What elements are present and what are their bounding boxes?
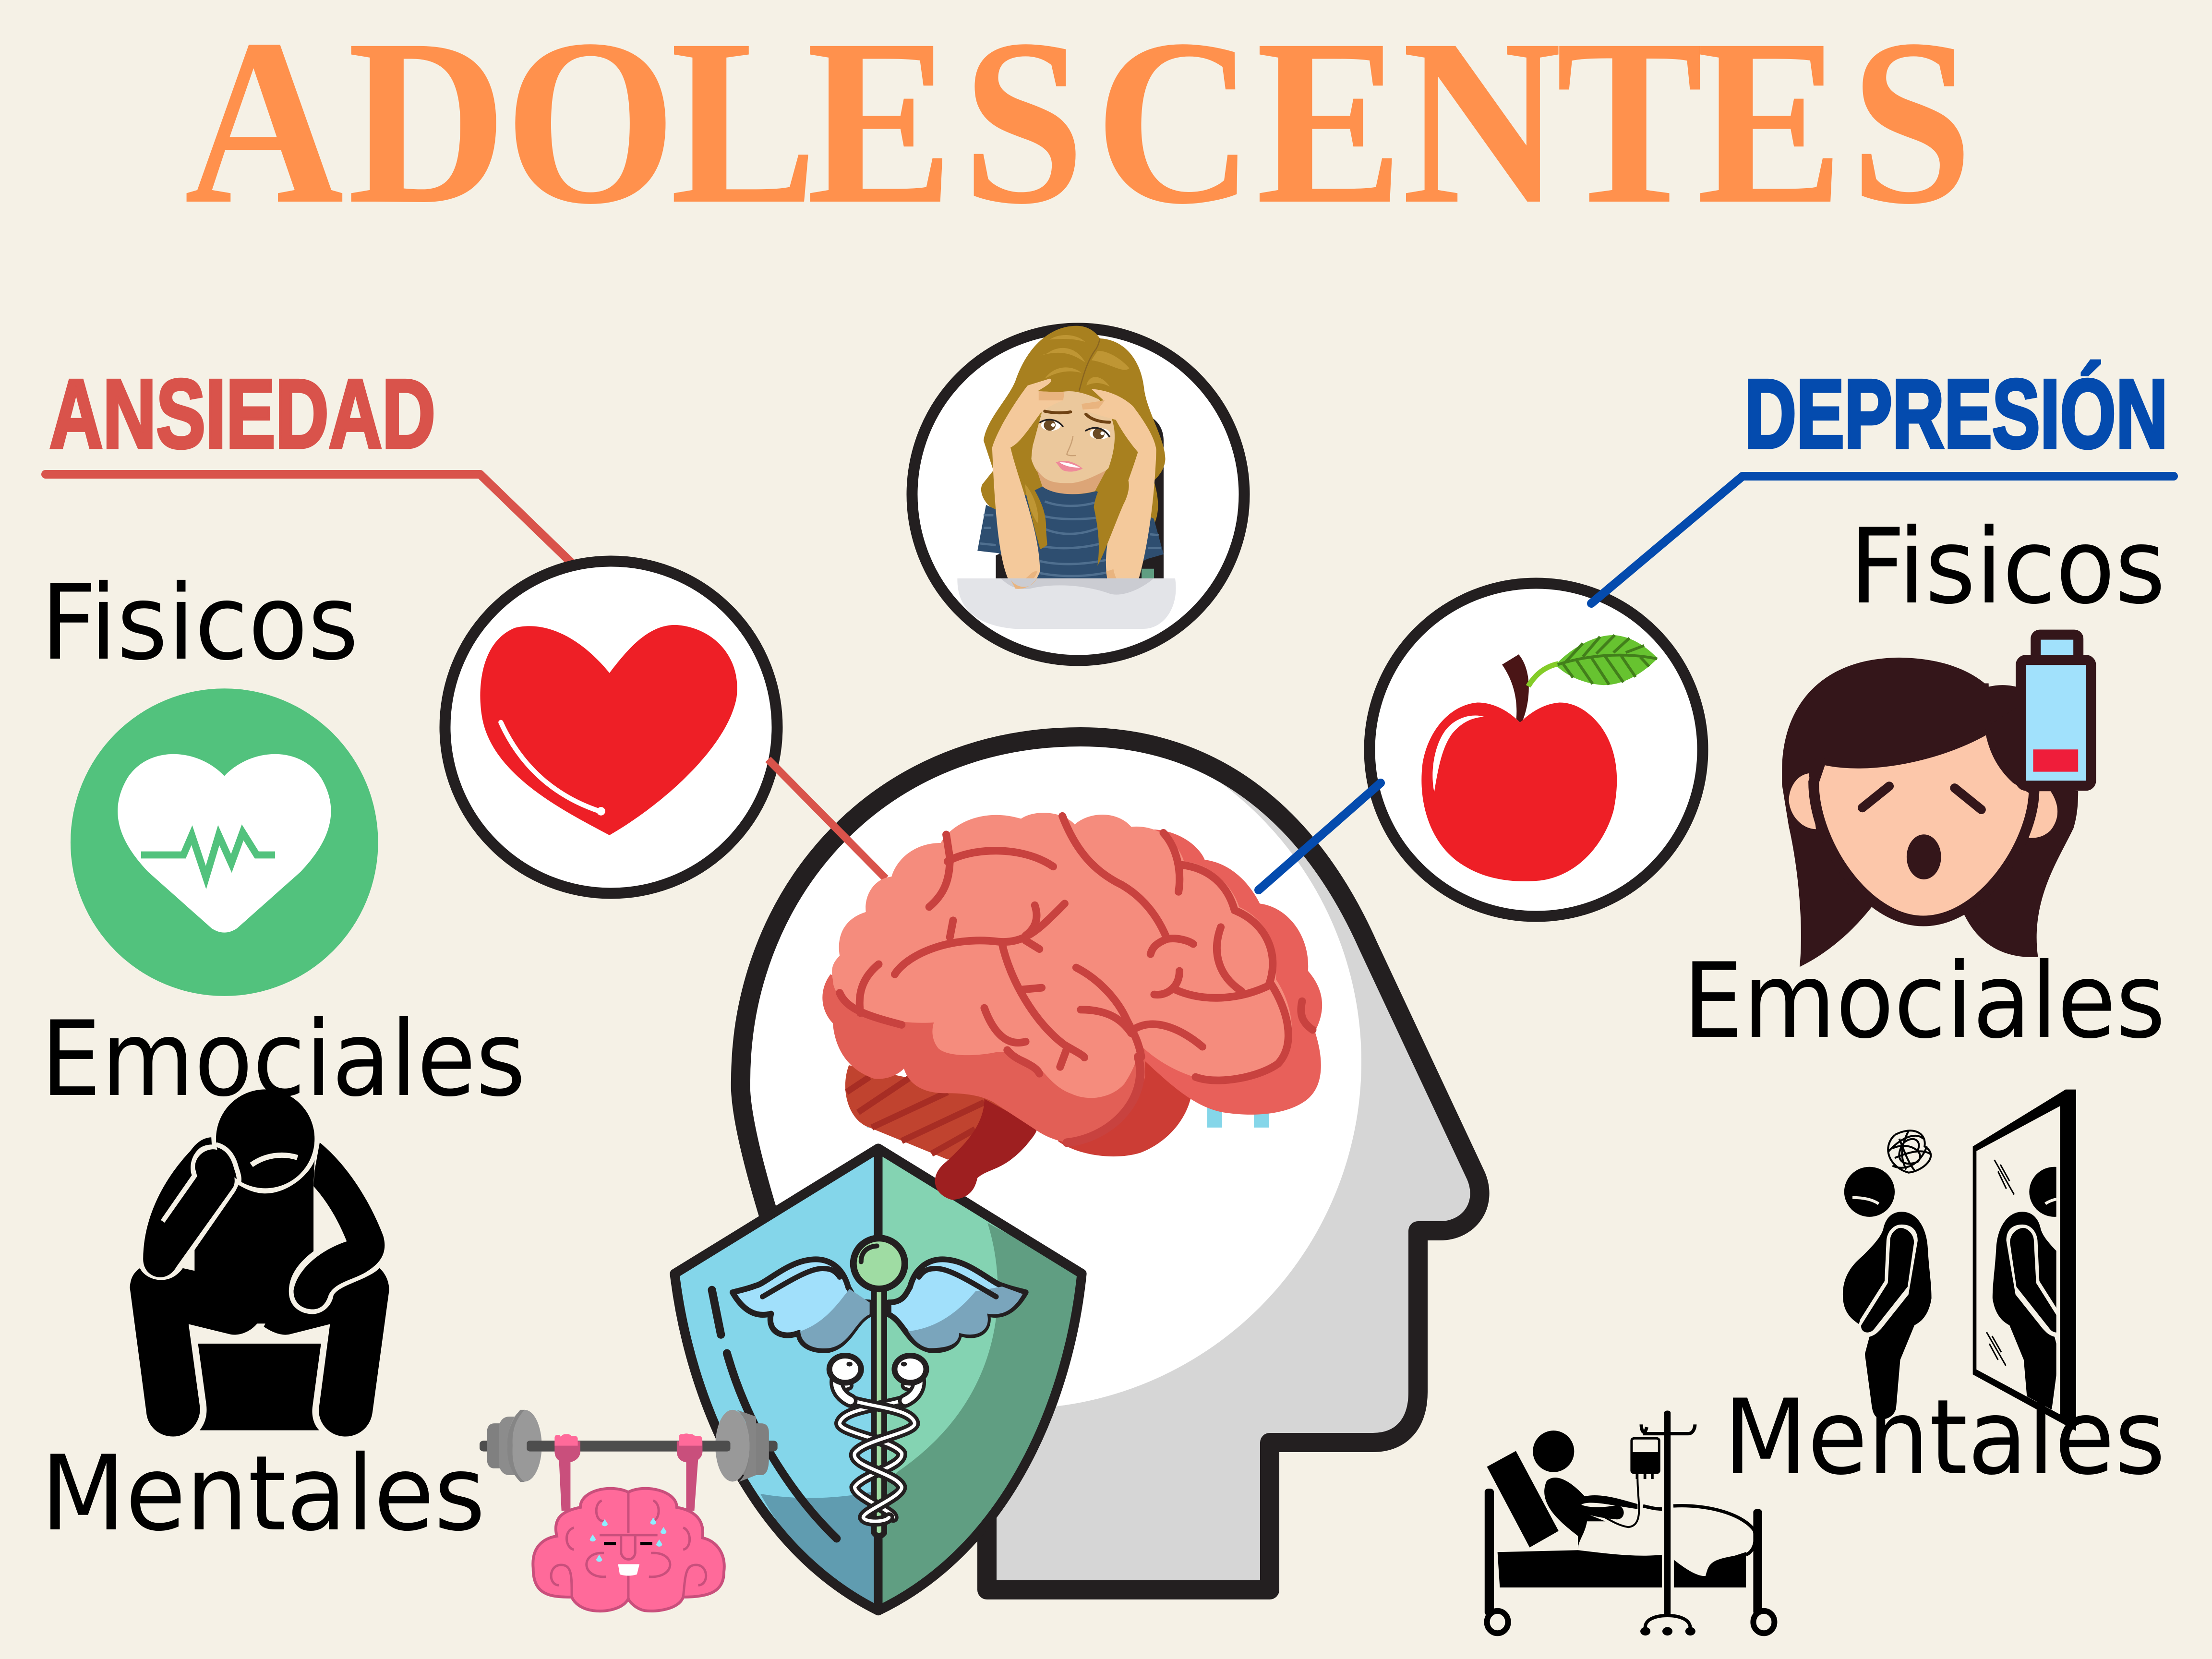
icon: seated thinking figure [130,1089,389,1437]
person [1843,1167,1932,1419]
circle: apple [1370,583,1703,916]
thought scribble [1888,1130,1931,1173]
IV pole [1664,1411,1671,1616]
arms [559,1458,698,1511]
connector: brain to heart [768,759,886,878]
icon: tired girl with low battery [1782,635,2091,967]
front hair [1010,411,1138,566]
reflection [1992,1166,2056,1409]
IV bag [1632,1438,1659,1473]
battery [2036,635,2079,660]
brain stem [935,1099,1037,1200]
icon: weightlifting pink brain [480,1410,778,1611]
label: fisicos left: Fisicos [41,563,359,683]
wing: left [733,1259,870,1350]
circle: worried girl [912,326,1244,661]
circle: heart [445,561,777,893]
icon: green heart pulse badge [71,688,378,996]
icon: red heart [480,625,737,835]
label: emociales right: Emociales [1683,941,2165,1061]
wing: right [889,1259,1026,1350]
hair back [981,326,1166,565]
brows and eyes [1045,411,1110,422]
mattress [1498,1550,1746,1587]
arms and hands [992,379,1064,589]
serpents [837,1373,919,1521]
shaded back lobe [1141,830,1322,1115]
shirt [977,487,1164,578]
labels: depresion [1683,506,2165,1498]
backrest [1487,1451,1559,1548]
face [604,1542,616,1545]
ears [1789,773,1816,829]
staff orb [854,1238,905,1289]
chair [996,417,1164,578]
label: mentales right: Mentales [1723,1377,2165,1498]
icon: patient in bed with IV [1485,1411,1774,1635]
eyes and mouth [1863,786,1981,810]
hair [1782,658,2078,967]
mirror frame [1973,1090,2076,1431]
pink brain body [533,1489,724,1611]
bed frame [1485,1489,1494,1615]
brain main surface [832,813,1292,1098]
label: emociales left: Emociales [41,999,526,1119]
cyan tabs [867,1104,1269,1128]
lips [1056,461,1083,472]
brain folds [840,816,1312,1142]
head silhouette [667,715,1480,1590]
face [1814,727,2034,921]
table [957,578,1176,629]
connector: brain to apple [1259,783,1381,890]
icon: apple body [1421,703,1617,881]
connector: ansiedad rule [46,474,571,563]
heading: ansiedad: ANSIEDAD [49,360,435,469]
staff [874,1286,884,1536]
barbell [480,1410,778,1482]
shaded front lobe [822,974,1145,1142]
labels: ansiedad [41,563,526,1554]
lower lobe [1058,1050,1191,1156]
icon: leaf [1557,635,1658,685]
patient [1533,1431,1574,1472]
brain [822,813,1322,1200]
connector: depresión rule [1591,476,2174,603]
cerebellum [845,1065,1039,1159]
shield with caduceus [674,1148,1082,1611]
icon: figure at mirror [1843,1090,2081,1431]
label: fisicos right: Fisicos [1850,506,2165,627]
label: mentales left: Mentales [41,1433,485,1554]
face [1031,391,1115,492]
